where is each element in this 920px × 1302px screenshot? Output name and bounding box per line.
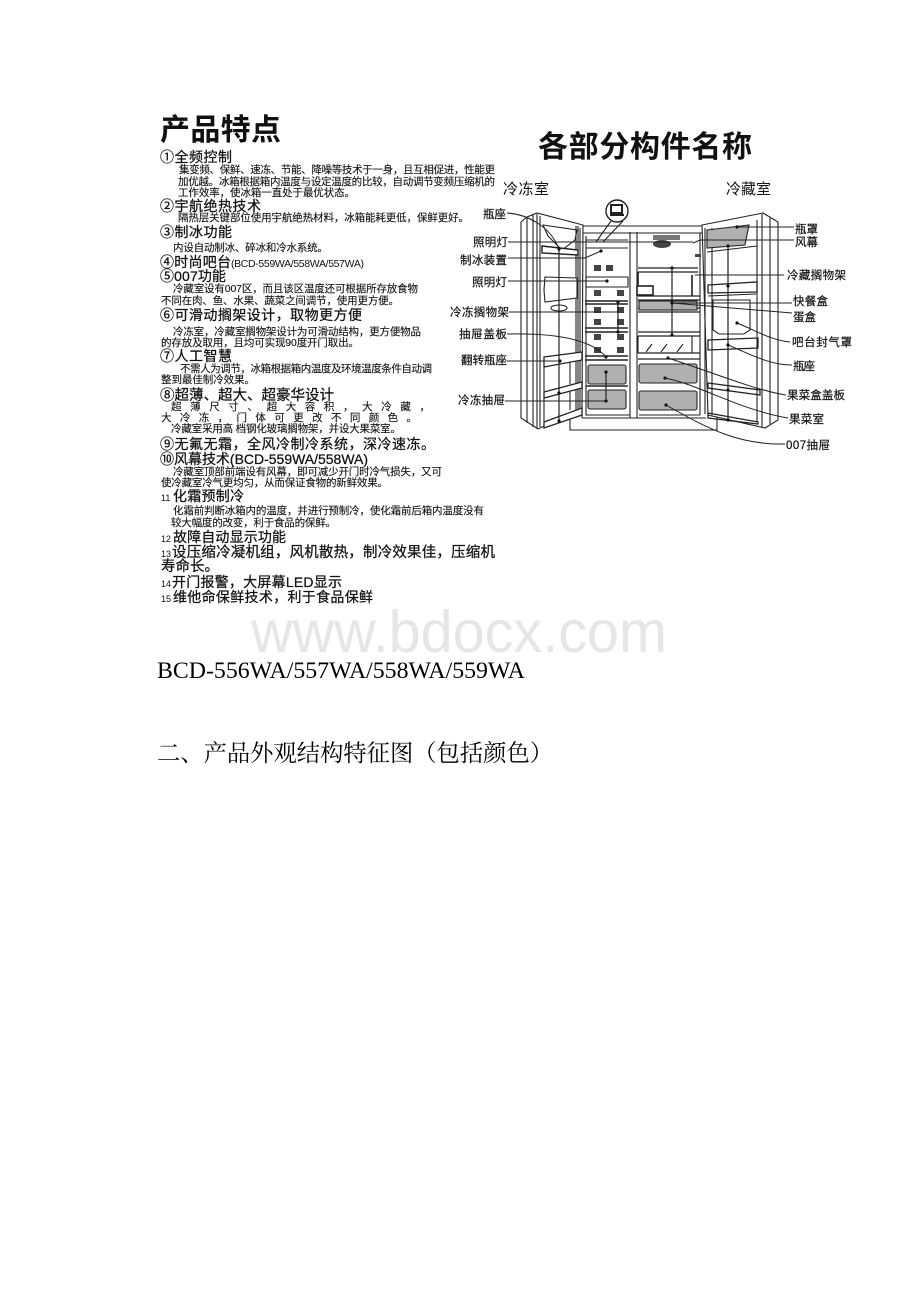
feature 13: 寿命长。 [161,557,219,575]
feature 11: 11 [161,493,170,503]
feature 11 [161,488,484,529]
panel: parts diagram [450,131,852,452]
feature 4: ④时尚吧台 [160,254,231,270]
left callout labels: 照明灯 [473,236,508,249]
panel: product features [160,114,496,605]
feature 5: ⑤007功能 [160,268,226,284]
right callout labels: 蛋盒 [793,310,816,324]
heading: component names: 各部分构件名称 [538,131,752,164]
feature 2: ②宇航绝热技术 [160,198,261,214]
right door [702,213,778,428]
feature 4 [160,254,364,270]
section heading: exterior structure: 二、产品外观结构特征图（包括颜色） [157,740,553,767]
feature 5: 不同在肉、鱼、水果、蔬菜之间调节，使用更方便。 [161,294,399,307]
refrigerator drawers [639,364,697,410]
right callout labels: 果菜室 [789,412,824,426]
label: freezer: 冷冻室 [503,180,549,198]
feature 3: 内设自动制冰、碎冰和冷水系统。 [173,241,328,254]
feature 7 [160,348,432,386]
left callout labels: 翻转瓶座 [461,353,507,367]
feature 3: ③制冰功能 [160,224,232,240]
left callout labels: 抽屉盖板 [459,327,508,341]
leader lines [505,213,794,444]
right callout labels: 果菜盒盖板 [787,388,846,402]
feature 2: 隔热层关键部位使用宇航绝热材料，冰箱能耗更低，保鲜更好。 [178,211,469,224]
freezer food [594,235,701,353]
feature 1: 工作效率，使冰箱一直处于最优状态。 [178,186,355,199]
right callout labels [786,222,852,452]
right callout labels: 风幕 [795,235,818,249]
feature 13 [161,544,496,575]
feature 12: 12 [161,534,171,544]
feature 1: 加优越。冰箱根据箱内温度与设定温度的比较，自动调节变频压缩机的 [178,175,495,188]
feature 1 [160,149,496,199]
feature 10 [160,451,442,489]
feature 7: 整到最佳制冷效果。 [161,373,255,386]
right callout labels: 快餐盒 [793,294,828,308]
feature 2 [160,198,469,224]
cabinet [570,226,717,430]
watermark: www.bdocx.com [250,599,667,665]
left callout labels: 冷冻抽屉 [458,393,505,407]
feature 14: 开门报警，大屏幕LED显示 [172,574,342,590]
left door [521,213,583,429]
feature 1: 集变频、保鲜、速冻、节能、降噪等技术于一身，且互相促进，性能更 [179,163,496,176]
feature 13: 设压缩冷凝机组，风机散热，制冷效果佳，压缩机 [172,544,496,561]
feature 6: 冷冻室，冷藏室搁物架设计为可滑动结构，更方便物品 [173,325,421,338]
left callout labels: 瓶座 [483,207,506,221]
left callout labels [450,207,509,407]
feature 9: ⑨无氟无霜，全风冷制冷系统，深冷速冻。 [160,436,435,452]
feature 14: 14 [161,579,171,589]
right callout labels: 瓶座 [793,359,815,373]
right callout labels: 吧台封气罩 [792,335,852,349]
quick meal box [637,286,653,295]
feature 6: 的存放及取用，且均可实现90度开门取出。 [161,336,359,349]
refrigerator line drawing [521,200,778,430]
feature 11: 化霜预制冷 [173,488,244,504]
heading: product features: 产品特点 [160,114,281,147]
leader dots [557,225,739,423]
feature 3 [160,224,328,254]
feature 11: 较大幅度的改变，利于食品的保鲜。 [171,516,336,529]
display panel callout [596,200,628,242]
feature 8 [160,387,430,435]
feature 12: 故障自动显示功能 [173,529,286,545]
feature 4: (BCD-559WA/558WA/557WA) [231,258,364,270]
snack box [639,301,697,310]
feature 8: 冷藏室采用高 档钢化玻璃搁物架，并设大果菜室。 [171,422,401,435]
feature 10: 使冷藏室冷气更均匀，从而保证食物的新鲜效果。 [161,476,388,489]
feature 1: ①全频控制 [160,149,232,165]
feature 8: 大 冷 冻 ， 门 体 可 更 改 不 同 颜 色 。 [161,411,417,424]
feature 6 [160,307,421,349]
feature 6: ⑥可滑动搁架设计，取物更方便 [160,307,362,323]
right callout labels: 冷藏搁物架 [787,268,846,282]
left callout labels: 制冰装置 [460,254,507,267]
right callout labels: 007抽屉 [786,438,830,452]
feature 7: 不需人为调节，冰箱根据箱内温度及环境温度条件自动调 [180,362,432,375]
feature 13: 13 [161,549,171,559]
feature 15: 15 [161,594,171,604]
left callout labels: 冷冻搁物架 [450,305,509,319]
feature 5 [160,268,418,307]
feature 7: ⑦人工智慧 [160,348,232,364]
feature 11: 化霜前判断冰箱内的温度，并进行预制冷，使化霜前后箱内温度没有 [173,504,484,517]
feature 15: 维他命保鲜技术，利于食品保鲜 [173,589,373,605]
feature 8: 超 薄 尺 寸 、 超 大 容 积 ， 大 冷 藏 ， [171,400,430,413]
label: refrigerator: 冷藏室 [726,181,771,198]
freezer drawers [588,365,626,409]
right callout labels: 瓶罩 [795,222,818,236]
left callout labels: 照明灯 [472,276,508,289]
model number line: BCD-556WA/557WA/558WA/559WA [157,658,525,683]
feature 5: 冷藏室设有007区，而且该区温度还可根据所存放食物 [173,282,418,295]
feature 10: 冷藏室顶部前端设有风幕，即可减少开门时冷气损失，又可 [173,465,442,478]
feature 8: ⑧超薄、超大、超豪华设计 [160,387,334,404]
feature 10: ⑩风幕技术(BCD-559WA/558WA) [160,451,368,467]
